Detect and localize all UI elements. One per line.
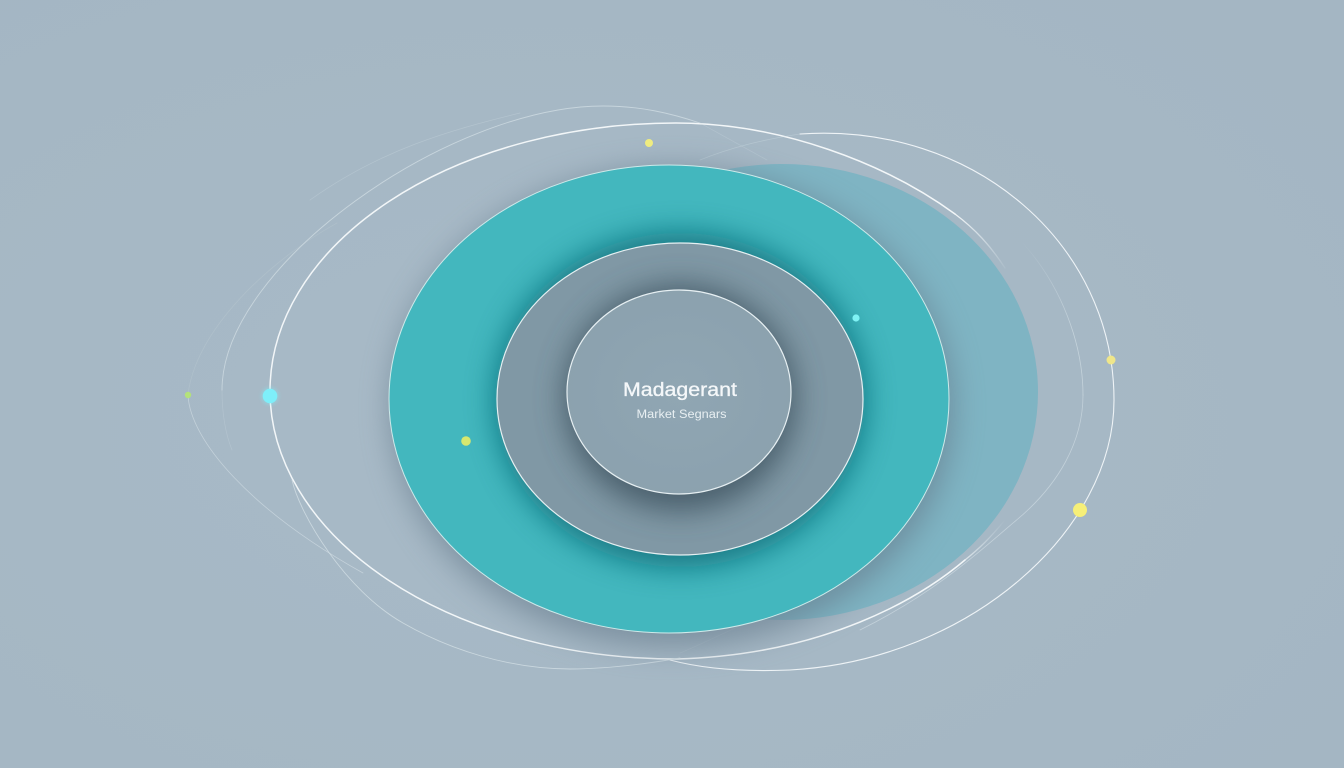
central title: Madagerant [623, 379, 738, 401]
main orbit fading top segment [955, 214, 1005, 268]
faint right orbit bottom [860, 395, 1083, 630]
node: yellow top [645, 139, 653, 147]
faint upper crossing [700, 123, 767, 160]
node: yellow right [1106, 356, 1116, 364]
green node orbit upper [188, 223, 337, 395]
middle ring [497, 243, 863, 555]
orbit lines [188, 106, 1114, 671]
outer right orbit [670, 133, 1114, 671]
faint right orbit top [1020, 240, 1083, 395]
node: yellow lower right [1073, 503, 1087, 517]
teal ring shadow [390, 168, 954, 648]
main orbit fading bottom segment [965, 520, 1005, 560]
node: yellow green on ring [461, 436, 471, 446]
middle ring shadow [495, 233, 865, 567]
faintest upper arc [310, 113, 520, 200]
faint lower left orbit [292, 480, 680, 669]
node: cyan left [261, 387, 279, 405]
node: cyan on ring [852, 314, 860, 322]
translucent offset disc [526, 164, 1038, 620]
faint left fade [222, 390, 232, 450]
central subtitle: Market Segnars [636, 409, 727, 421]
inner circle [567, 290, 791, 494]
node: green far left [185, 392, 191, 398]
outer right orbit faint start [700, 134, 800, 160]
teal ring [389, 165, 949, 633]
green node orbit lower [188, 395, 363, 573]
main bright orbit [270, 123, 965, 659]
faint lower right arc [680, 623, 747, 653]
inner circle shadow [564, 285, 796, 511]
faint upper left orbit [222, 106, 700, 390]
